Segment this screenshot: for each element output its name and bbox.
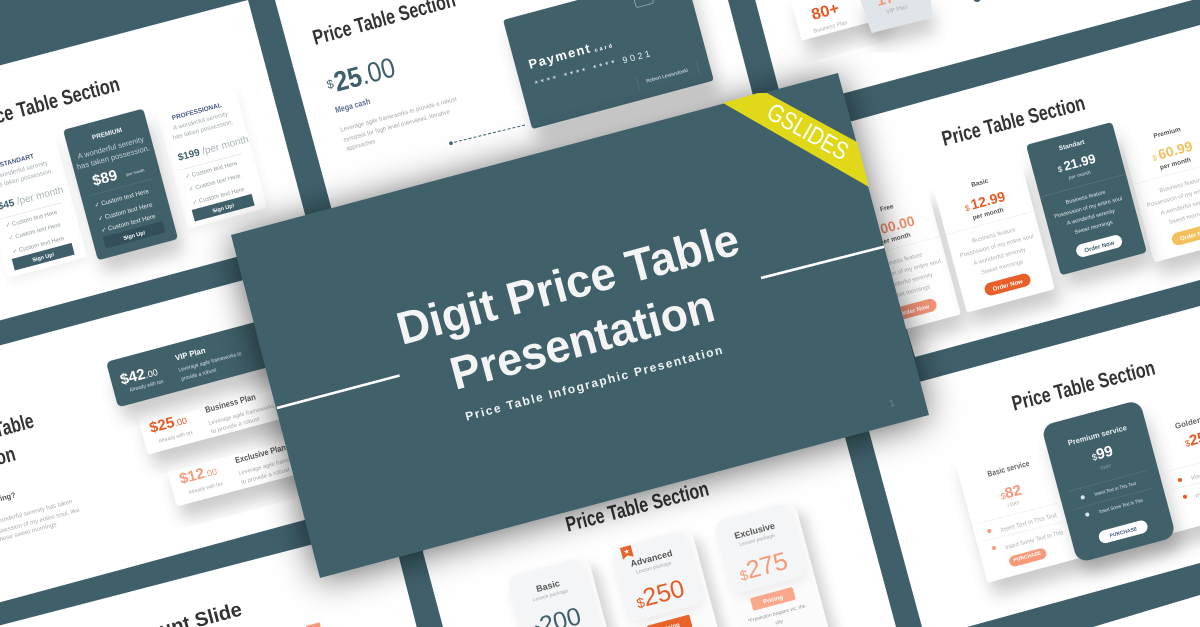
card: exclusive plan: Exclusive Plan (234, 442, 287, 465)
heading: slide left middle (0, 410, 36, 480)
card: free (840, 188, 961, 338)
panel: slide bottom left (0, 522, 420, 627)
card: standart: Possession of my entire soul (1054, 196, 1123, 220)
card: basic service (978, 459, 1064, 568)
card: basic: Sweet mornings (981, 259, 1024, 276)
card: standart: STANDART (0, 153, 35, 169)
card: professional: ✓ Custom text Here (192, 187, 246, 207)
card: standart: ✓ Custom text Here (5, 210, 59, 229)
card: premium service: PURCHASE (1109, 526, 1138, 539)
card: premium: ✓ Custom text Here (94, 188, 150, 209)
card: standart: A wonderful serenity (1066, 208, 1116, 227)
card: exclusive: city (775, 619, 784, 626)
card: premium: has taken possession. (76, 143, 151, 171)
card: business plan: $25.00 (148, 411, 189, 437)
accent line: left (277, 376, 400, 408)
text block: description: Leverage agile frameworks to provide a robust (340, 96, 458, 134)
card: basic: Business feature (972, 227, 1017, 245)
card: exclusive plan: $12.00 (178, 462, 219, 488)
text block: description: synopsis for high level overviews. Iterative (343, 108, 451, 144)
card: professional: A wonderful serenity (172, 110, 230, 132)
card: business plan: Leverage agile frameworks (208, 404, 275, 427)
card: vip plan: provide a robust (181, 367, 217, 383)
card: standart (1026, 122, 1147, 275)
card: basic service: $82 (998, 482, 1024, 504)
card: advanced: Advanced (629, 548, 673, 569)
label: mega cash: Mega cash (334, 96, 371, 115)
panel: slide top center (275, 0, 762, 240)
card: basic: Order Now (992, 279, 1024, 293)
card: exclusive plan: to provide a robust (241, 467, 291, 486)
card: free: Order Now (899, 304, 930, 318)
card: basic: per month (972, 207, 1004, 222)
card: premium: Sign Up! (123, 230, 146, 242)
icon: teal dot (973, 0, 981, 2)
card: premium service: Insert Some Text in This (1099, 498, 1144, 515)
card: vip plan: $42.00 (118, 362, 159, 389)
card: premium: PREMIUM (91, 127, 123, 142)
card: vip plan: VIP Plan (886, 4, 908, 16)
card: standart: Sign Up! (32, 252, 55, 264)
title: Presentation (445, 279, 720, 400)
panel: slide left middle (0, 265, 370, 605)
card: premium: per month (1159, 156, 1192, 171)
card: vip plan: Leverage agile frameworks to (178, 351, 242, 374)
page number: 1 (888, 398, 897, 410)
card: business plan (790, 0, 885, 40)
card: basic service: / DAY (1007, 500, 1021, 509)
card: premium: $ 60.99 (1150, 138, 1194, 164)
card: exclusive (712, 501, 831, 627)
card: advanced: $250 (632, 574, 688, 614)
card: premium service: Insert Text in This Text (1094, 481, 1138, 498)
subtitle: Price Table Infographic Presentation (464, 343, 724, 424)
card: basic service: PURCHASE (1013, 550, 1042, 564)
icon: star bookmark (620, 545, 634, 560)
card: exclusive plan: Leverage agile frameworks (238, 454, 305, 477)
card: professional: ✓ Custom text Here (185, 161, 239, 180)
text block: description (340, 96, 458, 153)
price: 25.00: $ (325, 77, 336, 92)
card: premium: A wonderful serenity (77, 135, 145, 161)
card: professional: has taken possession. (172, 119, 234, 142)
card: business plan: Already with tax (158, 430, 194, 445)
card: free: per month (879, 232, 911, 247)
card: standart: per month (1068, 170, 1092, 181)
card: free: Free (879, 203, 895, 213)
card: basic: Basic (971, 178, 990, 189)
card: exclusive: $275 (736, 547, 791, 587)
card: basic: Basic (535, 578, 561, 594)
card: business plan: Business Plan (813, 20, 848, 35)
card: exclusive: Lesson package (739, 533, 776, 548)
card: basic service: Insert Some Text in This (1004, 529, 1064, 551)
card: professional: $199 /per month (177, 134, 250, 164)
card: premium service: $99 (1090, 443, 1115, 465)
card: vip plan (106, 315, 292, 407)
card: free: A wonderful serenity (880, 272, 934, 292)
card: professional: ✓ Custom text Here (188, 173, 242, 193)
card: payment: Payment (527, 40, 592, 72)
card: premium (63, 109, 178, 260)
card: exclusive: Pricing (763, 595, 784, 606)
card: standart: Standart (1058, 139, 1086, 152)
price: 25.00: 25.00 (331, 52, 398, 98)
text block: description: approaches (345, 138, 376, 153)
icon: orange marker (306, 622, 321, 627)
panel: slide bottom center (423, 400, 896, 627)
card: payment: Robert Lewandoski (646, 68, 689, 85)
card: basic: $ 12.99 (962, 188, 1007, 214)
card: premium (1120, 112, 1200, 262)
card: advanced: Lesson package (636, 560, 673, 576)
card: premium service (1041, 400, 1176, 563)
card: standart: ✓ Custom text Here (12, 236, 66, 256)
card: premium: /per month (125, 167, 145, 177)
card: standart: Business feature (1065, 190, 1106, 206)
card: basic: A wonderful serenity (973, 247, 1027, 267)
card: vip plan: VIP Plan (174, 346, 207, 363)
ribbon: gslides: GSLIDES (762, 98, 853, 166)
card: free: Business feature (879, 252, 924, 270)
card: exclusive plan: Already with tax (188, 481, 224, 496)
card: golden service (1167, 407, 1200, 500)
text block: pricing description (0, 498, 81, 544)
card: payment (503, 0, 714, 129)
panel: slide top left (0, 0, 311, 323)
card: basic (505, 556, 624, 627)
card: professional (156, 89, 267, 229)
card: standart: ✓ Custom text Here (8, 222, 62, 242)
accent line: right (761, 247, 884, 278)
panel: corner slide (1093, 595, 1200, 627)
card: vip plan: Already with tax (129, 379, 165, 394)
card: payment: **** **** **** 9021 (534, 48, 651, 89)
panel: slide right (820, 25, 1200, 357)
card: basic service: Insert Text in This Text (1000, 512, 1058, 534)
card: basic: Lesson package (532, 588, 569, 603)
card: payment: card (594, 43, 613, 54)
card: exclusive: Exclusive (733, 521, 776, 541)
card: free: Sweet mornings (888, 284, 931, 301)
card: premium service: /DAY (1100, 463, 1113, 472)
card: advanced (609, 528, 728, 627)
card: professional: PROFESSIONAL (171, 102, 223, 122)
card: business plan: Business Plan (204, 392, 257, 415)
card: basic service: Basic service (986, 459, 1031, 479)
heading: slide right: Price Table Section (939, 92, 1088, 151)
panel: main title slide (231, 73, 929, 578)
arrow: dashed pointer (449, 125, 525, 145)
card: business plan: to provide a robust (211, 416, 261, 435)
card: premium: ✓ Custom text Here (101, 213, 157, 234)
heading: slide bottom right: Price Table Section (1009, 356, 1158, 416)
heading: slide bottom center: Price Table Section (563, 477, 711, 537)
card: premium service: Premium service (1067, 423, 1128, 447)
card: basic (933, 162, 1055, 313)
card: vip plan (858, 0, 933, 33)
card: business plan: 80+ (810, 0, 841, 24)
card: premium: $89 (91, 167, 119, 190)
card: basic: Possession of my entire soul (959, 234, 1035, 259)
card: exclusive plan (165, 410, 370, 506)
card: business plan (136, 358, 341, 454)
panel: slide bottom right (860, 306, 1200, 627)
card: standart: $ 21.99 (1056, 151, 1097, 175)
panel: slide top right (750, 0, 1200, 109)
icon: star bookmark: ★ (623, 547, 631, 557)
card: standart: Sweet mornings (1074, 220, 1114, 236)
card: standart (0, 138, 87, 278)
card: exclusive: *Frankston bogans vic, the (748, 603, 806, 624)
card: standart: Order Now (1084, 241, 1115, 254)
card: free: $ 00.00 (867, 212, 917, 240)
card: professional: Sign Up! (212, 203, 235, 215)
ribbon: gslides (723, 93, 869, 187)
card: free: Possession of my entire soul (866, 259, 942, 284)
card: premium: ✓ Custom text Here (97, 201, 154, 223)
card: service background (954, 390, 1200, 583)
title: Digit Price Table (391, 213, 744, 355)
card: premium: Premium (1153, 126, 1182, 140)
